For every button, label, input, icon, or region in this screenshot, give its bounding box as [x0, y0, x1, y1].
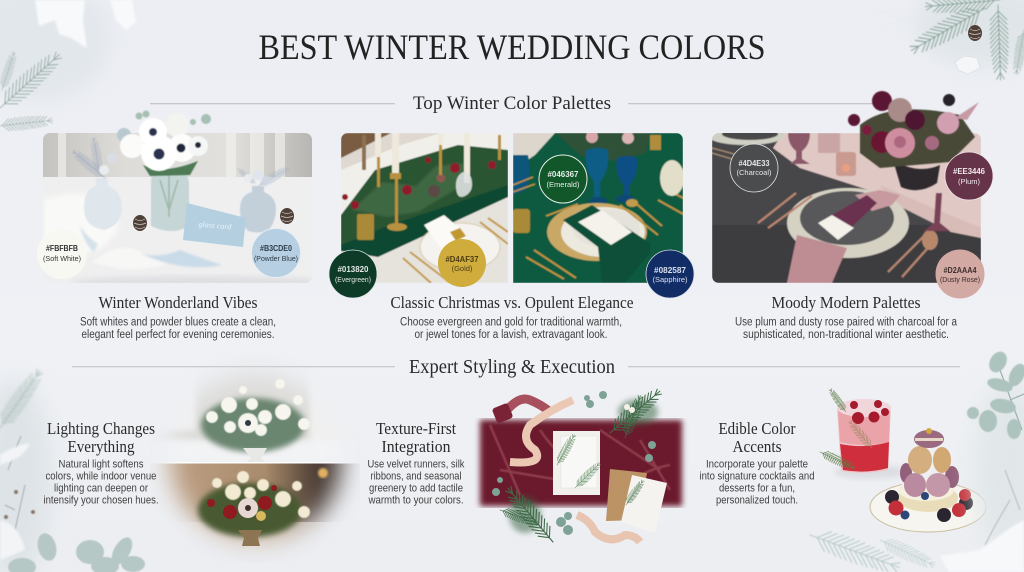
text: edible description: personalized touch.	[716, 494, 798, 506]
heading: lighting changes everything: Lighting Changes	[47, 419, 155, 438]
corner foliage: lower left	[0, 366, 145, 572]
floral bouquet	[848, 91, 979, 190]
colour swatch: sapphire: (Sapphire)	[652, 275, 688, 284]
colour swatch: evergreen	[329, 250, 377, 298]
heading: winter wonderland vibes: Winter Wonderland Vibes	[98, 293, 258, 312]
text: classic christmas description: or jewel tones for a lavish, extravagant look.	[414, 329, 608, 341]
photo: christmas table	[341, 133, 508, 284]
heading: classic christmas: Classic Christmas vs. Opulent Elegance	[390, 293, 634, 312]
block: lighting changes everything	[44, 368, 360, 556]
colour swatch: dusty rose: (Dusty Rose)	[940, 275, 980, 284]
block: texture-first integration	[368, 385, 692, 547]
colour swatch: dusty rose: #D2AAA4	[944, 266, 977, 275]
heading: edible color accents: Edible Color	[718, 419, 796, 438]
text: classic christmas description: Choose evergreen and gold for traditional warmth,	[400, 316, 622, 328]
photo: charcoal table	[708, 127, 981, 283]
colour swatch: sapphire	[646, 250, 694, 298]
panel: moody modern	[708, 91, 993, 341]
heading: lighting changes everything: Everything	[68, 437, 135, 456]
colour swatch: powder blue: (Powder Blue)	[254, 254, 298, 263]
heading: texture-first integration: Integration	[382, 437, 451, 456]
frosted sprigs	[70, 137, 291, 190]
title: BEST WINTER WEDDING COLORS	[258, 27, 766, 67]
colour swatch: plum: (Plum)	[958, 177, 981, 186]
corner foliage: lower right	[806, 348, 1024, 572]
text: texture description: greenery to add tactile	[369, 482, 463, 494]
bouquet: anemones	[117, 110, 211, 176]
text: texture description: Use velvet runners, silk	[368, 458, 465, 470]
photo: velvet runner flat lay	[470, 385, 692, 547]
section heading: expert styling and execution: Expert Styling & Execution	[409, 356, 615, 378]
text: winter wonderland description: Soft whites and powder blues create a clean,	[80, 316, 276, 328]
colour swatch: powder blue	[252, 228, 300, 278]
section heading: top winter color palettes: Top Winter Color Palettes	[413, 93, 611, 114]
text: lighting description: colors, while indoor venue	[46, 470, 156, 482]
text: edible description: into signature cocktails and	[700, 470, 814, 482]
text: edible description: Incorporate your palette	[706, 458, 808, 470]
colour swatch: powder blue: #B3CDE0	[260, 244, 292, 253]
photo: jewel tone table	[513, 131, 684, 283]
colour swatch: gold: #D4AF37	[446, 255, 479, 264]
heading: moody modern palettes: Moody Modern Palettes	[772, 293, 920, 312]
panel: winter wonderland	[37, 110, 330, 341]
text: edible description: desserts for a fun,	[719, 482, 795, 494]
colour swatch: emerald: #046367	[548, 170, 579, 179]
colour swatch: soft white: #FBFBFB	[46, 244, 78, 253]
panel: classic christmas vs opulent elegance	[329, 131, 694, 341]
vases	[84, 172, 276, 232]
colour swatch: charcoal: (Charcoal)	[736, 168, 772, 177]
text: lighting description: lighting can deepen or	[54, 482, 148, 494]
colour swatch: gold: (Gold)	[452, 264, 473, 273]
colour swatch: dusty rose	[936, 250, 984, 298]
corner foliage: top left	[0, 0, 136, 133]
colour swatch: gold	[438, 239, 486, 287]
corner foliage: top right	[875, 0, 1024, 80]
colour swatch: soft white: (Soft White)	[43, 254, 81, 263]
colour swatch: soft white	[37, 229, 87, 279]
heading: texture-first integration: Texture-First	[376, 419, 456, 438]
text: moody modern description: Use plum and dusty rose paired with charcoal for a	[735, 316, 958, 328]
colour swatch: evergreen: (Evergreen)	[335, 275, 371, 284]
photo: daylight and evening centerpiece	[154, 368, 360, 556]
colour swatch: charcoal: #4D4E33	[738, 159, 770, 168]
colour swatch: plum: #EE3446	[953, 167, 986, 176]
text: lighting description: Natural light softens	[58, 458, 144, 470]
pine cones	[133, 208, 294, 231]
colour swatch: evergreen: #013820	[338, 265, 369, 274]
text: winter wonderland description: elegant feel perfect for evening ceremonies.	[82, 329, 274, 341]
colour swatch: charcoal	[730, 144, 778, 192]
text: lighting description: intensify your chosen hues.	[44, 494, 158, 506]
text: moody modern description: suphisticated, non-traditional winter aesthetic.	[743, 329, 949, 341]
illustration: cocktail and macaron tower	[818, 387, 986, 532]
block: edible color accents	[700, 387, 986, 532]
colour swatch: emerald: (Emerald)	[547, 180, 580, 189]
text: texture description: ribbons, and seasonal	[370, 470, 462, 482]
heading: edible color accents: Accents	[732, 437, 782, 456]
text: texture description: warmth to your colors.	[368, 494, 464, 506]
colour swatch: sapphire: #082587	[654, 266, 687, 275]
place card: glass card	[198, 220, 233, 231]
colour swatch: plum	[945, 152, 993, 200]
place card	[183, 203, 246, 247]
photo: white table setting	[37, 110, 330, 288]
colour swatch: emerald	[539, 155, 587, 203]
